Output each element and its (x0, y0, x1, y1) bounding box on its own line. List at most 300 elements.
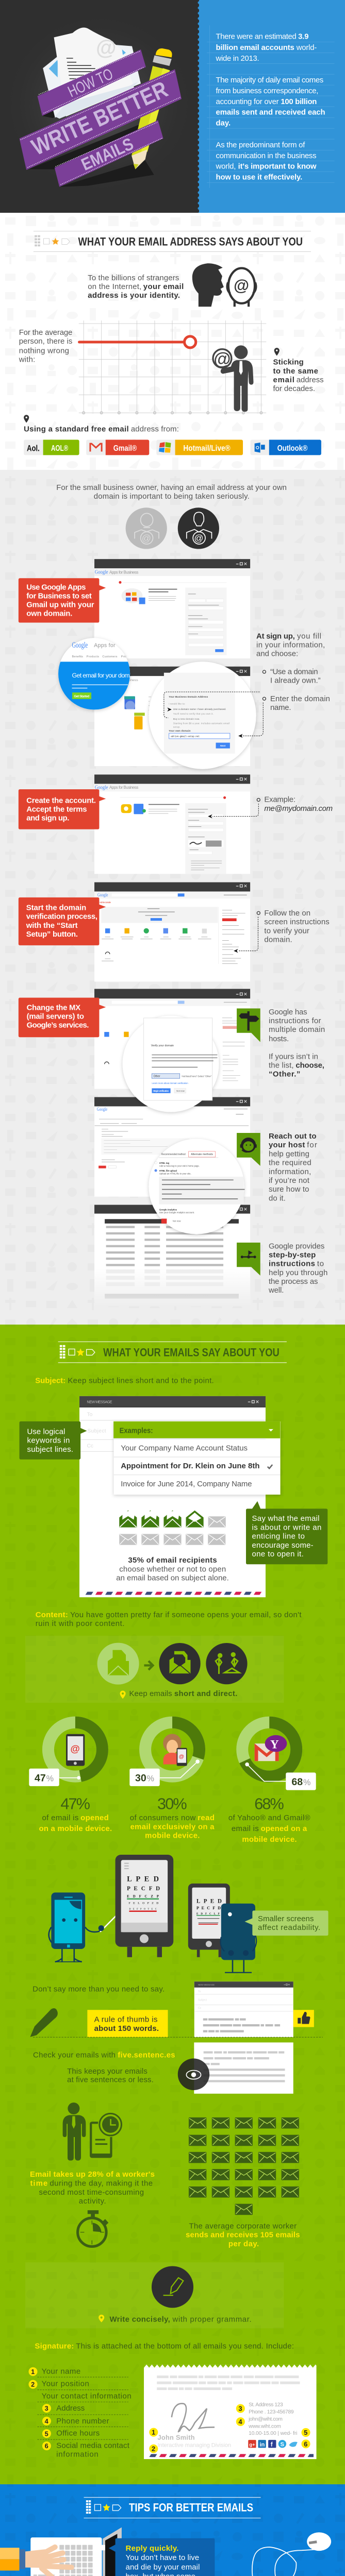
statistic: read exclusively on mobile (130, 1794, 215, 1840)
email window: subject line: Subject (87, 1428, 106, 1434)
list: signature items: 5 (45, 2430, 48, 2437)
panel: write concisely: with proper grammar. (172, 2315, 252, 2324)
email window: five sentences (194, 2042, 293, 2094)
paper: signature example: Phone . 123-456789 (249, 2409, 294, 2415)
callout: say what the email is about (246, 1501, 327, 1564)
email window: subject line: Cc (87, 1443, 93, 1449)
email window: short message: To (198, 1990, 201, 1993)
callout: start the domain verification: Setup” button. (26, 930, 78, 939)
callout: reply quickly: and die by your email (126, 2563, 200, 2571)
callout: use google apps: Use Google Apps (26, 583, 86, 591)
paper: signature example: Interactive managing Division (157, 2443, 231, 2449)
panel: intro statistics: world- (296, 43, 317, 52)
paper: signature example: S (281, 2442, 284, 2448)
illustration: tablet eye chart: L P E D (127, 1875, 159, 1884)
button: Outlook (251, 439, 321, 455)
list: signature items: 6 (45, 2442, 48, 2450)
panel: intro statistics: As the predominant form of (216, 141, 305, 149)
text: at sign up: you fill (297, 632, 321, 641)
panel: intro statistics: 3.9 (298, 32, 309, 41)
panel: intro statistics: billion email accounts (216, 43, 294, 52)
panel: keep emails short: Keep emails (129, 1689, 172, 1698)
callout: 150 words: about 150 words. (94, 2024, 159, 2033)
button: AOL (24, 439, 79, 455)
screenshot: DNS table (94, 1205, 250, 1307)
statistic: opened on mobile (39, 1794, 112, 1833)
text: step by step instructions: instructions (269, 1260, 315, 1268)
text: content: Content: (36, 1611, 68, 1619)
paper: signature example: 1 (152, 2429, 155, 2436)
callout: create the account: Create the account. (26, 796, 96, 805)
statistic: yahoo and gmail on mobile: email is (232, 1824, 259, 1833)
form: business domain address (164, 692, 259, 749)
text: follow the on screen instructions: Follow the on (264, 909, 310, 918)
text: step by step instructions: well. (268, 1286, 284, 1295)
callout: start the domain verification: verification process, (26, 912, 97, 921)
screenshot: create account: Google (95, 785, 108, 791)
donut chart: 47 percent: 47 (35, 1773, 46, 1784)
text: reach out to your host: if you’re not (269, 1176, 310, 1185)
text: sticking to the same email: email (273, 376, 294, 384)
email window: short message: NEW MESSAGE (198, 1984, 215, 1986)
text: Google has instructions: “Other.” (269, 1070, 300, 1079)
paper: signature example: 6 (304, 2440, 307, 2448)
panel: intro statistics (207, 25, 335, 188)
text: at sign up (256, 632, 325, 685)
panel: intro statistics: from business correspondence, (216, 87, 318, 95)
icon grid: 105 emails (189, 2117, 299, 2215)
illustration: tablet eye chart: D E F P O T E C (129, 1908, 157, 1910)
list: signature items: 1 (31, 2368, 35, 2376)
statistic: opened on mobile: opened (80, 1814, 109, 1822)
screenshot: create account: Apps for Business (109, 785, 138, 790)
list: signature items: 4 (45, 2417, 49, 2425)
text: reach out to your host: for (307, 1141, 317, 1149)
icon: eye circle (178, 2059, 209, 2090)
form: business domain address: Your Business Domain Address (169, 696, 208, 698)
form: business domain address: You'll need to verify that you own it. (173, 713, 213, 715)
text: reach out to your host: your host (269, 1141, 305, 1149)
form: business domain address: Starting from $8 a year. Includes automatic email (173, 722, 229, 724)
callout: smaller screens: Smaller screens (258, 1914, 314, 1923)
email window: subject line: NEW MESSAGE (87, 1400, 112, 1404)
list: signature items: Your contact information (42, 2392, 132, 2400)
icon: skull versus person circles: @ (194, 533, 204, 544)
magnifier: verify domain dialog (123, 1016, 219, 1112)
callout: create the account: and sign up. (26, 814, 69, 823)
illustration: phone character with pointer (49, 1892, 130, 1962)
text: follow the on screen instructions: to verify your (264, 926, 309, 935)
text: sticking to the same email: Sticking (273, 358, 304, 367)
icon: skull versus person circles: @ (142, 533, 151, 544)
callout: start the domain verification: with the “Start (26, 921, 78, 930)
callout: create the account: Accept the terms (26, 805, 87, 814)
text: signature: Signature: (35, 2342, 74, 2350)
text: at sign up: in your information, (256, 641, 325, 650)
text: five sentenc.es: Check your emails with (33, 2050, 116, 2059)
magnifier: get email for your domain: Apps for (94, 642, 116, 649)
text: average person: For the average (19, 328, 72, 337)
ribbon: how to: HOW TO (65, 64, 116, 100)
donut chart: 68 percent: % (303, 1778, 310, 1787)
text: five sentenc.es: at five sentences or less. (67, 2076, 154, 2084)
magnifier: get email for your domain: Pric (121, 655, 126, 658)
paper: signature example: in (259, 2442, 265, 2448)
text: follow the on screen instructions (234, 909, 330, 953)
list: signature items (28, 2367, 132, 2459)
envelope rate icons (119, 1511, 226, 1545)
text: email takes up 28 percent: Email takes up 28% of a worker's (30, 2170, 155, 2179)
text: identity statement: your email (143, 282, 184, 291)
button: Hotmail: Hotmail/Live® (183, 444, 231, 453)
list: signature items: Your name (42, 2367, 80, 2376)
magnifier: get email for your domain: Get Started (74, 695, 89, 699)
statistic: opened on mobile: of email is (42, 1814, 78, 1822)
email window: subject line: choose whether or not to open (119, 1565, 226, 1573)
donut chart: 30 percent: 30 (135, 1773, 146, 1784)
text: email takes up 28 percent: during the day, making it the (50, 2179, 153, 2188)
paper: signature example: 10.00-15.00 | wed- fri (249, 2431, 297, 2436)
callout: start the domain verification (19, 897, 106, 945)
text: follow the on screen instructions: screen instructions (264, 918, 330, 926)
statistic: yahoo and gmail on mobile: opened on a (261, 1824, 307, 1833)
button: Gmail: Gmail® (113, 444, 137, 453)
illustration: tablet eye chart: F E L O P Z D (129, 1902, 158, 1905)
illustration: small tablet and phone character: P E C F D (196, 1906, 221, 1910)
text: reach out to your host (269, 1132, 317, 1202)
paper: signature example: John Smith (157, 2434, 195, 2442)
list: signature items: 3 (45, 2404, 48, 2412)
ribbon shadows (28, 74, 154, 187)
donut chart: 30 percent (129, 1722, 200, 1786)
text: average person: with: (19, 355, 35, 364)
illustration: tablet eye chart: E D F C Z P (127, 1895, 159, 1899)
screenshot: Google Apps sign up: Google (95, 570, 108, 575)
callout: reply quickly (109, 2538, 215, 2576)
text: step by step instructions (268, 1242, 327, 1295)
panel: keep emails short: short and direct. (174, 1689, 237, 1698)
donut chart: 47 percent: @ (71, 1743, 80, 1754)
list: signature items: Office hours (56, 2429, 100, 2437)
text: average person: nothing wrong (19, 347, 69, 355)
icon tag: thumbs up (293, 2010, 314, 2027)
magnifier: verify domain dialog: Not now (176, 1090, 185, 1092)
text: step by step instructions: the process as (269, 1277, 318, 1286)
text: step by step instructions: step-by-step (269, 1250, 316, 1259)
text: average corporate worker: The average corporate worker (189, 2222, 297, 2230)
text: reach out to your host: Reach out to (269, 1132, 317, 1141)
magnifier: verify domain dialog: Not listed here? Select "Other" (182, 1075, 212, 1078)
text: step by step instructions: Google provides (269, 1242, 324, 1250)
panel: intro statistics: There were an estimated (216, 32, 297, 41)
callout: use google apps: Gmail up with your (26, 601, 94, 609)
text: Google has instructions: If yours isn’t in (269, 1053, 318, 1061)
icon: skull versus person circles (126, 507, 219, 549)
divider (33, 2037, 323, 2038)
screenshot: admin console: Admin console (100, 901, 111, 904)
icon: stopwatch (78, 2210, 108, 2246)
list: signature items: information (56, 2450, 98, 2459)
panel: intro statistics: The majority of daily email comes (216, 76, 323, 84)
icon: pencil (132, 48, 172, 170)
screenshot: domain step: iness (130, 679, 138, 682)
callout: change the MX: (mail servers) to (27, 1012, 84, 1021)
statistic: read exclusively on mobile: mobile device. (145, 1832, 200, 1840)
statistic: read exclusively on mobile: read (198, 1814, 215, 1822)
heading: what your emails say about you: WHAT YOUR EMAILS SAY ABOUT YOU (103, 1346, 280, 1359)
magnifier: verify domain dialog: Learn more about domain verification (152, 1082, 188, 1084)
button: Gmail (86, 439, 149, 455)
button: AOL: AOL® (51, 444, 69, 453)
dropdown: subject examples: Your Company Name Account Status (121, 1444, 248, 1452)
statistic: yahoo and gmail on mobile: 68% (254, 1794, 284, 1812)
text: using a standard free email: address from: (131, 425, 179, 434)
panel: write concisely: Write concisely, (109, 2315, 170, 2324)
panel: keep emails short (25, 1636, 284, 1703)
magnifier: html file upload: HTML tag (159, 1162, 169, 1164)
text: five sentenc.es: This keeps your emails (67, 2067, 147, 2076)
text: small business owner (56, 483, 287, 501)
text: at sign up: At sign up, (256, 632, 295, 641)
hero panel: title illustration (2, 0, 201, 213)
statistic: read exclusively on mobile: 30% (157, 1794, 187, 1812)
dropdown: subject examples: Examples: (120, 1427, 153, 1435)
donut chart: 47 percent (29, 1722, 102, 1786)
email window: subject line: To (87, 1412, 93, 1418)
screenshot: Google Apps sign up (94, 559, 250, 658)
heading: tips for better emails (84, 2497, 261, 2518)
callout: say what the email is about: is about or write an (252, 1523, 321, 1532)
icon: worker with clock (63, 2103, 123, 2161)
text: enter the domain name: name. (270, 703, 291, 712)
magnifier: html file upload: HTML file upload (159, 1170, 177, 1172)
magnifier: get email for your domain: Products (87, 655, 99, 658)
text: small business owner: domain is important to being taken seriously. (94, 492, 250, 501)
callout: smaller screens (244, 1910, 328, 1936)
text: email takes up 28 percent: second most time-consuming (39, 2188, 144, 2197)
callout: create the account (19, 789, 106, 829)
email window: subject line (79, 1396, 266, 1597)
dropdown: subject examples: Appointment for Dr. Klein on June 8th (121, 1462, 259, 1470)
statistic: opened on mobile: 47% (60, 1794, 90, 1812)
form: business domain address: Buy a new domain now. (173, 718, 200, 720)
text: small business owner: For the small business owner, having an email address at your own (56, 483, 287, 492)
magnifier: verify domain dialog: Other (154, 1075, 160, 1078)
text: example address: me@mydomain.com (264, 804, 333, 813)
text: average corporate worker (186, 2222, 300, 2248)
text: email takes up 28 percent (30, 2170, 155, 2206)
text: sticking to the same email (273, 348, 324, 393)
callout: use google apps: own domain. (26, 609, 72, 618)
screenshot: alternate methods: Google (97, 1107, 107, 1112)
icon tag: milestone (237, 1243, 260, 1276)
callout: say what the email is about: encourage some- (252, 1541, 314, 1550)
text: at sign up: “Use a domain (270, 667, 318, 676)
statistic: yahoo and gmail on mobile: of Yahoo® and Gmail® (228, 1814, 310, 1822)
paper: signature example (144, 2365, 317, 2459)
text: Google has instructions: the list, (269, 1061, 294, 1070)
panel: intro statistics: emails sent and received each (216, 108, 325, 117)
panel: intro statistics: how to use it effectively. (216, 173, 302, 182)
email window: short message (194, 1981, 293, 2037)
email window: short message: Cc (198, 2007, 202, 2010)
text: Google has instructions: instructions for (269, 1016, 321, 1025)
text: follow the on screen instructions: domain. (264, 936, 292, 944)
text: identity statement (88, 274, 184, 300)
magnifier: html file upload: Use your Google Analytics account. (159, 1211, 194, 1214)
magnifier: verify domain dialog: Begin verification (153, 1090, 169, 1092)
icon: person holding at sign: @ (213, 349, 231, 369)
panel: intro statistics: wide in 2013. (216, 54, 259, 63)
callout: use google apps (19, 578, 106, 622)
form: business domain address: I would like to: (169, 703, 185, 705)
text: reach out to your host: the required (269, 1159, 311, 1167)
text: email takes up 28 percent: activity. (79, 2197, 106, 2206)
text: example address: Example: (264, 795, 295, 804)
callout: say what the email is about: enticing line to (252, 1532, 305, 1540)
panel: intro statistics: world, (216, 162, 236, 171)
magnifier: html file upload (149, 1139, 244, 1234)
donut chart: 47 percent: % (46, 1774, 54, 1784)
text: step by step instructions: to (317, 1260, 324, 1268)
form: business domain address: Next (220, 744, 226, 747)
callout: reply quickly: Reply quickly. (126, 2544, 178, 2553)
text: reach out to your host: sure how to (269, 1185, 309, 1194)
magnifier: domain address form (149, 662, 256, 769)
icon: head silhouette and at-sign face (192, 263, 256, 307)
email window: subject line: an email based on subject alone. (116, 1573, 229, 1582)
callout: 150 words: A rule of thumb is (94, 2015, 157, 2024)
magnifier: get email for your domain: Benefits (72, 655, 83, 658)
text: enter the domain name: Enter the domain (270, 694, 330, 703)
icon: envelope with letter (43, 28, 141, 118)
screenshot: verify your domain (94, 989, 250, 1089)
text: identity statement: To the billions of strangers (88, 274, 179, 282)
magnifier: verify domain dialog: Verify your domain (151, 1044, 174, 1047)
statistic: read exclusively on mobile: email exclusively on a (130, 1823, 215, 1832)
illustration: laptop left with hands (0, 2527, 122, 2576)
screenshot: alternate methods (94, 1097, 250, 1197)
statistic: opened on mobile: on a mobile device. (39, 1824, 112, 1833)
screenshot: admin console: Google (97, 893, 108, 898)
illustration: small tablet and phone character (188, 1884, 256, 1973)
text: reach out to your host: do it. (269, 1194, 286, 1202)
dropdown: subject examples (113, 1421, 281, 1495)
callout: reply quickly: You don’t have to live (126, 2553, 199, 2562)
chart: decades timeline grid (79, 320, 266, 414)
panel: intro statistics: 100 billion (281, 97, 317, 106)
panel: intro statistics: it's important to know (238, 162, 317, 171)
icon: person holding at sign (213, 345, 254, 412)
callout: use google apps: for Business to set (26, 592, 92, 601)
paper: signature example: 4 (238, 2418, 242, 2426)
statistic: yahoo and gmail on mobile: mobile device. (242, 1835, 297, 1844)
magnifier: html file upload: Google Analytics (159, 1209, 177, 1211)
callout: change the MX: Google’s services. (27, 1021, 89, 1029)
text: Google has instructions: choose, (295, 1061, 324, 1070)
list: signature items: Social media contact (56, 2441, 130, 2450)
screenshot: domain step (94, 667, 250, 766)
illustration: right laptop with hands and mouse (223, 2532, 345, 2576)
panel: intro statistics: accounting for over (216, 97, 279, 106)
callout: 150 words (87, 2010, 168, 2037)
ribbon: emails (55, 120, 163, 187)
icon: head silhouette and at-sign face: @ (234, 276, 249, 294)
text: average corporate worker: sends and receives 105 emails (186, 2231, 300, 2240)
list: signature items: 2 (31, 2381, 35, 2388)
donut chart: 68 percent (242, 1722, 316, 1790)
callout: change the MX (19, 997, 106, 1037)
screenshot: create account (94, 774, 250, 874)
paper: signature example: f (271, 2441, 273, 2448)
ribbon: emails: EMAILS (78, 134, 137, 175)
donut chart: 68 percent: 68 (291, 1776, 303, 1788)
list: signature items: Phone number (56, 2417, 109, 2426)
text: Google has instructions: multiple domain (269, 1025, 325, 1034)
callout: logical keywords: subject lines. (27, 1445, 73, 1454)
text: identity statement: on the Internet, (88, 282, 141, 291)
magnifier: html file upload: Recommended method (161, 1153, 186, 1156)
form: business domain address: adrive-gmail-setup.net (171, 735, 200, 738)
text: email takes up 28 percent: time (30, 2179, 47, 2188)
callout: start the domain verification: Start the domain (26, 904, 86, 912)
text: subject: Subject: (35, 1376, 65, 1385)
ribbon: how to (38, 49, 146, 116)
callout: logical keywords: Use logical (27, 1428, 65, 1436)
email window: short message: Subject (198, 1998, 207, 2002)
statistic: read exclusively on mobile: of consumers now (130, 1814, 196, 1822)
heading: what your email address says about you (34, 231, 311, 252)
callout: say what the email is about: one to open it. (252, 1550, 304, 1558)
icon tag: signpost (237, 1008, 260, 1042)
text: subject: Keep subject lines short and to the point. (68, 1376, 214, 1385)
text: Google has instructions: Google has (269, 1008, 307, 1016)
text: using a standard free email: Using a standard free email (24, 425, 129, 434)
panel: intro statistics: day. (216, 119, 231, 128)
icon: utility knife (30, 2008, 58, 2037)
text: Google has instructions (269, 1008, 325, 1079)
callout: logical keywords (20, 1421, 87, 1460)
paper: signature example: St. Address 123 (249, 2402, 283, 2408)
magnifier: html file upload: Not now (173, 1219, 181, 1222)
ribbon: write better: WRITE BETTER (28, 76, 172, 160)
heading: what your emails say about you (58, 1342, 287, 1363)
magnifier: get email for your domain (57, 638, 132, 713)
illustration: tablet eye chart: P E C F D (127, 1886, 160, 1892)
screenshot: Google Apps sign up: Apps for Business (109, 570, 138, 574)
paper: signature example: 3 (238, 2405, 242, 2413)
list: signature items: Address (56, 2404, 85, 2413)
magnifier: html file upload: Alternate methods (191, 1153, 213, 1156)
panel: write concisely (25, 2262, 284, 2328)
text: sticking to the same email: for decades. (273, 384, 315, 393)
paper: signature example: www.wiht.com (248, 2424, 281, 2429)
paper: signature example: 5 (304, 2429, 307, 2436)
text: average person: person, there is (19, 337, 72, 346)
paper: signature example: 2 (152, 2445, 155, 2453)
panel: intro statistics: communication in the business (216, 151, 317, 160)
text: signature: This is attached at the bottom of all emails you send. Include: (76, 2342, 294, 2350)
callout: smaller screens: affect readability. (258, 1923, 320, 1932)
heading: tips for better emails: TIPS FOR BETTER EMAILS (129, 2501, 253, 2514)
magnifier: html file upload: Upload an HTML file to your site. (159, 1173, 191, 1175)
statistic: yahoo and gmail on mobile (228, 1794, 310, 1844)
text: enter the domain name (238, 694, 330, 738)
illustration: small tablet and phone character: L P E D (196, 1898, 222, 1904)
illustration: tablet eye chart (116, 1855, 173, 1957)
callout: change the MX: Change the MX (27, 1003, 80, 1012)
text: content (36, 1611, 302, 1628)
